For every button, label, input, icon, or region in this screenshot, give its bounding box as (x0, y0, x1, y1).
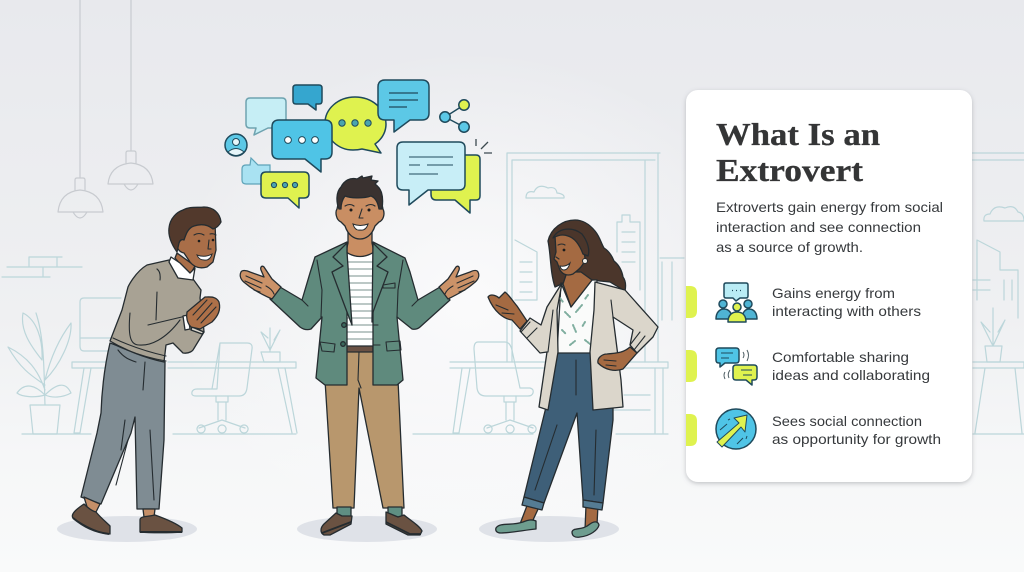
icon: group conversation (716, 283, 757, 322)
lime tab 3 (686, 414, 697, 446)
item 1 (686, 283, 921, 322)
lime small bubble (261, 172, 309, 208)
left plant (8, 313, 71, 434)
centre man neck (346, 232, 374, 256)
icon: two-way talk (716, 348, 757, 385)
background office line art (2, 0, 1024, 434)
item 3 text: Sees social connection (772, 413, 922, 429)
woman raised hand (488, 292, 527, 329)
description: interaction and see connection (716, 219, 921, 235)
centre man head (336, 176, 384, 239)
heading: What Is an (716, 116, 880, 152)
spark lines (476, 139, 492, 153)
item 3 text (772, 413, 941, 447)
pale bubble top left (246, 98, 286, 135)
centre man left hand (240, 266, 281, 299)
item 3 text: as opportunity for growth (772, 431, 941, 447)
heading: Extrovert (716, 152, 863, 188)
wall shelves left (2, 257, 82, 277)
left man trousers (81, 343, 165, 509)
woman back hair (548, 220, 626, 291)
centre man jacket (270, 242, 450, 385)
lime back bubble (431, 155, 480, 213)
description: Extroverts gain energy from social (716, 199, 943, 215)
woman cuffs and flats (496, 497, 603, 537)
item 1 text: interacting with others (772, 303, 921, 319)
centre man socks and shoes (321, 507, 422, 535)
left man head (169, 207, 221, 275)
woman cardigan (520, 282, 658, 410)
pale small bubble (242, 158, 270, 184)
heading (716, 116, 880, 188)
item 1 text: Gains energy from (772, 285, 895, 301)
item 3 (686, 409, 941, 449)
right side wall art (972, 153, 1024, 434)
woman floral top (557, 280, 597, 353)
woman face and neck (553, 229, 592, 307)
speech bubble cluster (225, 80, 492, 213)
person icon (225, 134, 247, 156)
description (716, 199, 943, 255)
centre man belt (346, 345, 373, 352)
item 2 text: Comfortable sharing (772, 349, 909, 365)
centre man right hand (439, 266, 479, 299)
left man clasped hands (187, 297, 220, 329)
figure: left man bowing (72, 207, 221, 534)
floor shadows (57, 516, 619, 542)
pendant lamps (58, 0, 153, 218)
item 2 text: ideas and collaborating (772, 367, 930, 383)
centre man trousers (325, 343, 404, 508)
left desk with monitor and chair (22, 298, 297, 434)
woman hand on hip (598, 347, 637, 370)
lime tab 2 (686, 350, 697, 382)
right desk with chair (413, 342, 668, 434)
small blue bubble (293, 85, 322, 110)
description: as a source of growth. (716, 239, 863, 255)
left man collar (169, 257, 195, 280)
main blue bubble (272, 120, 332, 172)
big pale bubble (397, 142, 465, 205)
figure: centre man (240, 176, 479, 535)
item 2 (686, 348, 930, 385)
icon: growth arrow (716, 409, 756, 449)
woman jeans (524, 352, 613, 503)
info panel (686, 90, 972, 482)
figure: woman (488, 220, 658, 537)
left man sweater (110, 260, 204, 362)
lime oval bubble (325, 97, 386, 153)
window and city (507, 153, 684, 362)
left man cuffs (183, 315, 204, 334)
centre man striped shirt (346, 248, 374, 346)
left man shoes (72, 497, 182, 534)
item 2 text (772, 349, 930, 383)
share network icon (440, 100, 469, 132)
item 1 text (772, 285, 921, 319)
top right blue bubble (378, 80, 429, 132)
lime tab 1 (686, 286, 697, 318)
